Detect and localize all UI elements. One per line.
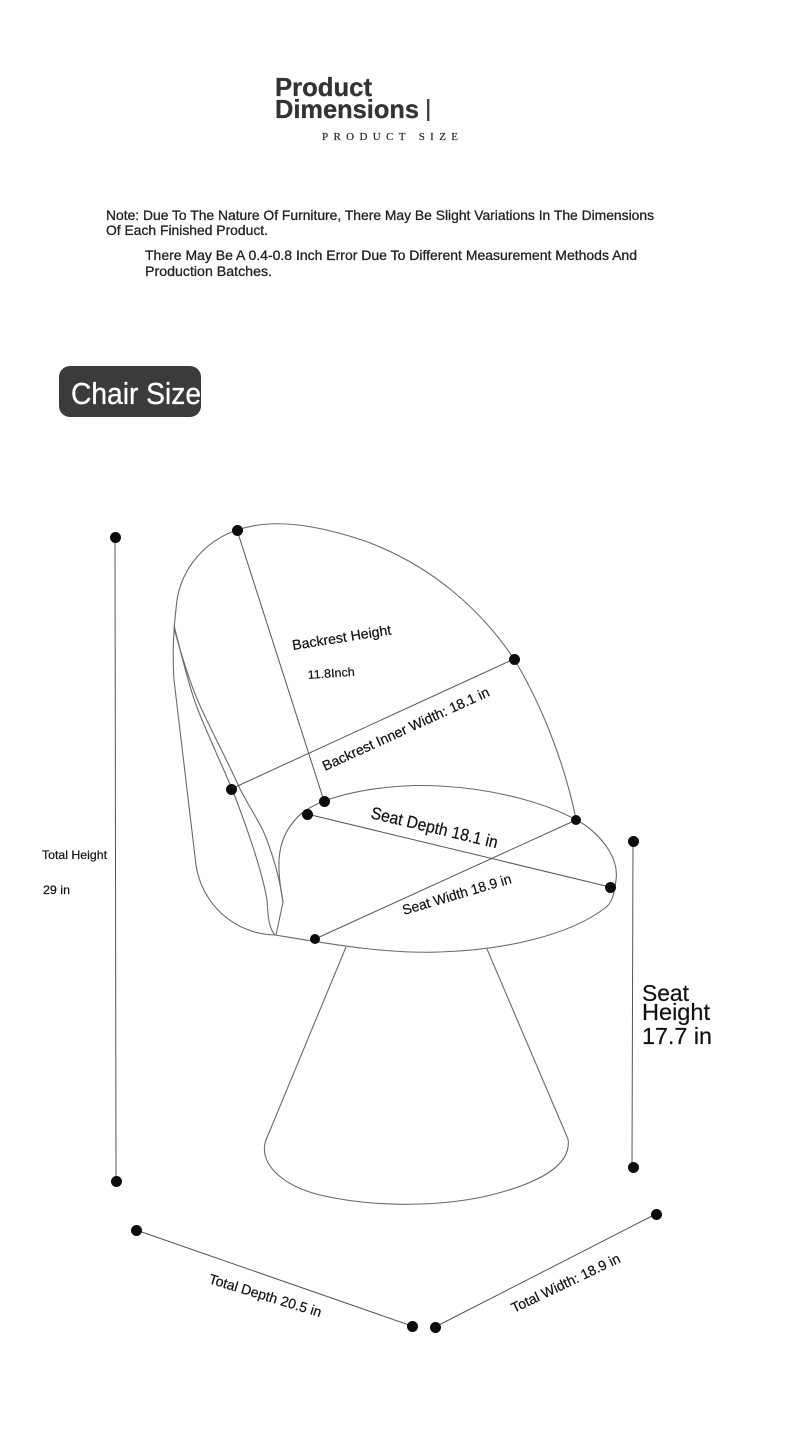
dimension: total height [110,532,122,1187]
dimension: total depth [131,1225,418,1332]
label: backrest height: 11.8Inch [307,665,355,682]
label: seat depth: Seat Depth 18.1 in [369,803,500,852]
dimension: seat depth [302,809,616,893]
chair outline [173,524,616,1204]
note text: Of Each Finished Product. [106,222,268,238]
label: seat height: Seat [642,980,690,1006]
dimension: seat width [310,815,581,944]
subtitle: PRODUCT SIZE [322,131,458,143]
note text: There May Be A 0.4-0.8 Inch Error Due To Different Measurement Methods And [145,247,637,263]
label: seat height [642,980,712,1049]
label: seat height: 17.7 in [642,1023,712,1049]
dimension: total width [430,1209,662,1333]
label: total height: Total Height [42,848,108,862]
label: total height [42,848,108,897]
badge: chair size: Chair Size [71,376,201,411]
note text [106,207,654,279]
dimension: backrest height [232,525,330,807]
label: backrest height: Backrest Height [291,622,392,653]
dimension: backrest inner width [226,654,520,795]
label: total depth: Total Depth 20.5 in [207,1271,324,1320]
base legs [266,947,568,1140]
badge: chair size [59,366,201,417]
seat outline [275,786,616,952]
dimension: seat height [628,836,639,1173]
label: seat width: Seat Width 18.9 in [400,870,513,918]
backrest outline [173,524,576,935]
label: seat height: Height [642,999,711,1025]
label: backrest inner width: Backrest Inner Width: 18.1 in [320,684,492,774]
note text: Note: Due To The Nature Of Furniture, There May Be Slight Variations In The Dimensions [106,207,654,223]
label: backrest height [291,622,392,682]
label: total width: Total Width: 18.9 in [508,1250,623,1316]
note text: Production Batches. [145,263,272,279]
title: Dimensions [275,94,419,124]
title: Product [275,72,372,102]
title [275,72,429,124]
backrest inner edges [174,625,275,935]
label: total height: 29 in [43,883,70,897]
base ellipse [264,1139,568,1204]
